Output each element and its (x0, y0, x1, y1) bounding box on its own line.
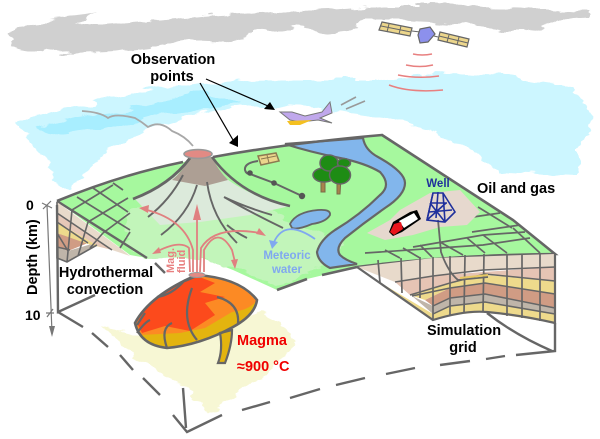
label: meteoric water: water (271, 264, 303, 276)
wire frame of block (57, 205, 555, 432)
depth axis (42, 201, 55, 337)
volcano (133, 150, 290, 243)
label: temperature: ≈900 °C (237, 359, 290, 375)
oil well pipe (438, 220, 488, 280)
blue sky cloud (17, 73, 593, 190)
label: meteoric water: Meteoric (263, 250, 311, 262)
label: oil and gas: Oil and gas (477, 181, 555, 197)
truck (389, 210, 421, 236)
yellow reservoir (460, 275, 488, 278)
label: depth 0: 0 (26, 197, 34, 213)
pond (290, 210, 330, 228)
surface outline top (57, 135, 555, 290)
trees (313, 155, 350, 194)
contrail smoke (82, 111, 193, 146)
magmatic fluid arrows (139, 204, 266, 272)
satellite (379, 22, 469, 47)
label: well: Well (426, 178, 450, 190)
label: simulation grid: Simulation (427, 323, 501, 339)
motion lines (341, 97, 365, 109)
crater (184, 150, 212, 158)
right surface grid (365, 207, 540, 258)
gray cloud band (7, 6, 590, 53)
label: depth: Depth (km) (25, 219, 41, 295)
label: hydrothermal convection: convection (67, 282, 143, 298)
magma tail (218, 330, 232, 363)
left edge of surface (57, 201, 165, 273)
sensor line with stations (245, 161, 305, 199)
observation arrows (200, 79, 275, 147)
label: magmatic fluid: fluid (176, 250, 188, 273)
darker blue cloud patch (37, 90, 240, 135)
light green volcano flank zone (125, 195, 345, 287)
magma chamber (135, 272, 257, 363)
label: observation points: Observation (131, 52, 215, 68)
pale yellow heat halo (100, 312, 300, 413)
label: depth 10: 10 (25, 307, 41, 323)
left surface grid (72, 183, 130, 248)
satellite signal arcs (389, 54, 443, 91)
meteoric water arrow (269, 229, 315, 249)
plane (280, 102, 332, 125)
label: observation points: points (150, 69, 194, 85)
well tower (427, 192, 455, 222)
right cross-section (357, 254, 555, 323)
ground surface (57, 135, 555, 290)
oil field patch (367, 190, 480, 240)
left cross-section (57, 202, 130, 262)
building (258, 153, 279, 165)
label: simulation grid: grid (449, 340, 477, 356)
label: magma: Magma (237, 333, 288, 349)
river (285, 138, 405, 268)
label: hydrothermal convection: Hydrothermal (59, 265, 153, 281)
label: magmatic fluid: Mag. (165, 248, 177, 273)
